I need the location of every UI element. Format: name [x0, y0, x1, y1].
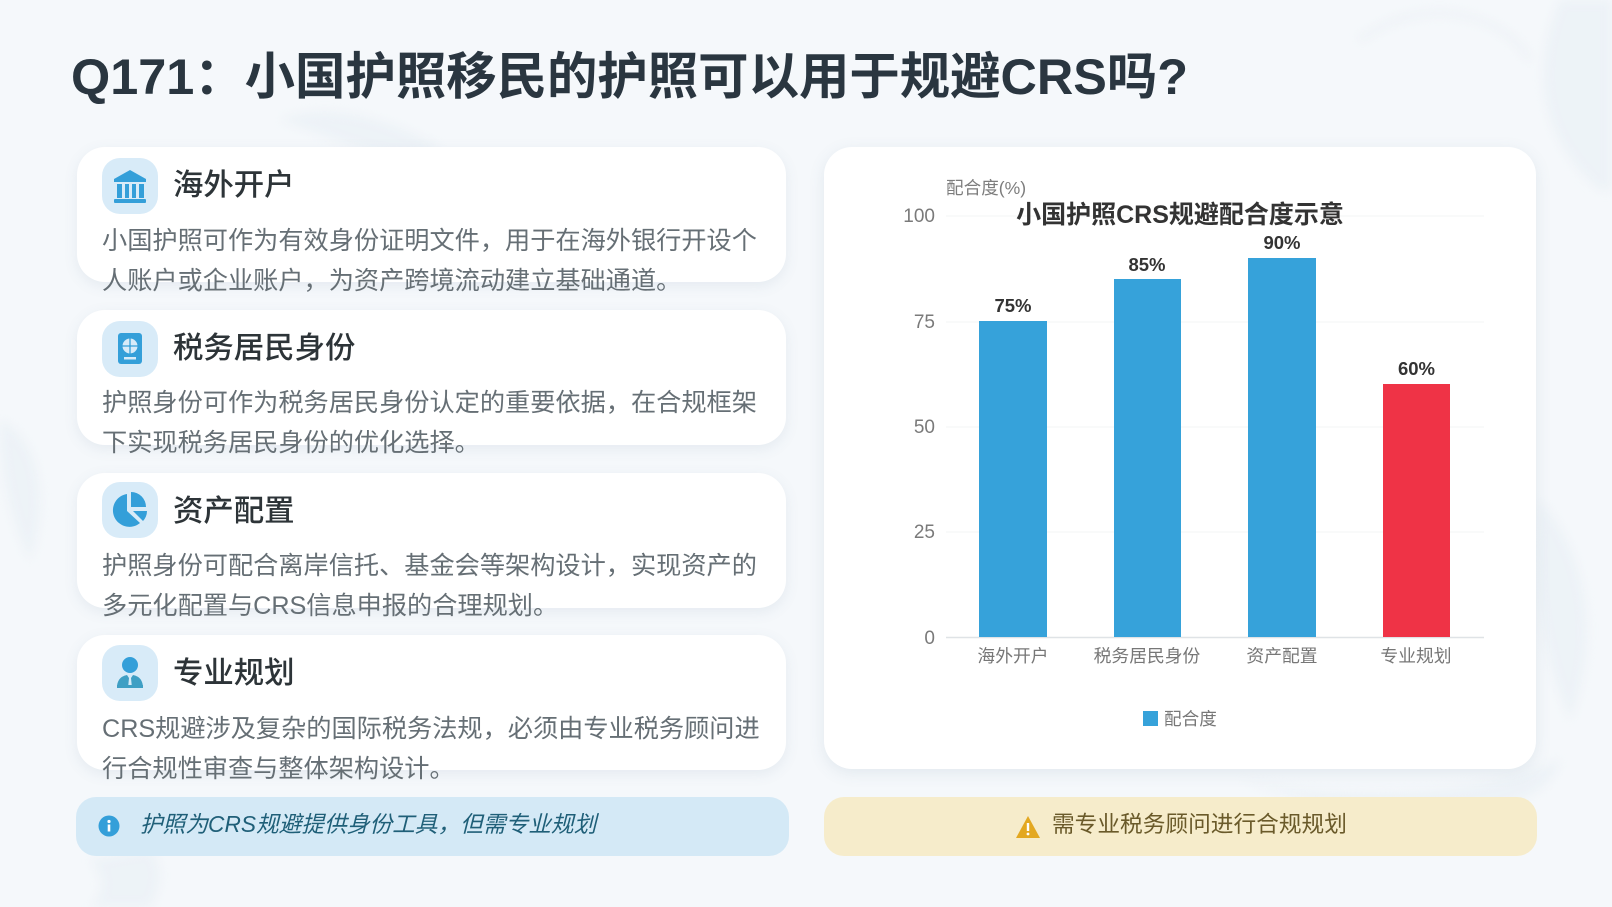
- callout text: 护照为CRS规避提供身份工具，但需专业规划: [140, 811, 596, 837]
- value labels: 90%: [1263, 232, 1301, 253]
- chart title: 小国护照CRS规避配合度示意: [1016, 200, 1344, 229]
- icon: pie chart: [102, 482, 158, 538]
- y axis labels: 75: [914, 312, 935, 333]
- panel: 海外开户: [77, 147, 786, 282]
- panel: 税务居民身份: [77, 310, 786, 445]
- y axis labels: [903, 206, 935, 649]
- panel: 资产配置: [77, 473, 786, 608]
- card body text: [102, 389, 757, 457]
- card body text: 多元化配置与CRS信息申报的合理规划。: [102, 592, 558, 620]
- y axis labels: 25: [914, 522, 935, 543]
- callout: info: [76, 797, 789, 856]
- x axis labels: 税务居民身份: [1094, 646, 1201, 666]
- y axis title: 配合度(%): [946, 178, 1026, 198]
- card body text: 行合规性审查与整体架构设计。: [102, 755, 455, 783]
- legend: 配合度: [1164, 709, 1217, 729]
- title: Q171：小国护照移民的护照可以用于规避CRS吗?: [71, 48, 1188, 105]
- card heading: 税务居民身份: [173, 331, 355, 365]
- y axis labels: 100: [903, 206, 935, 227]
- card body text: CRS规避涉及复杂的国际税务法规，必须由专业税务顾问进: [102, 715, 760, 743]
- card body text: 小国护照可作为有效身份证明文件，用于在海外银行开设个: [102, 227, 757, 255]
- panel: 专业规划: [77, 635, 786, 770]
- card body text: 下实现税务居民身份的优化选择。: [102, 429, 480, 457]
- callout: warning: [824, 797, 1537, 856]
- card body text: 人账户或企业账户，为资产跨境流动建立基础通道。: [102, 267, 681, 295]
- y axis labels: 50: [914, 417, 935, 438]
- card heading: 资产配置: [173, 494, 295, 528]
- card heading: 海外开户: [173, 168, 295, 202]
- card heading: 专业规划: [173, 656, 295, 690]
- icon: warning: [1016, 816, 1040, 838]
- card body text: 护照身份可作为税务居民身份认定的重要依据，在合规框架: [102, 389, 757, 417]
- panel: bar chart: [824, 147, 1536, 769]
- icon: bank: [102, 158, 158, 214]
- value labels: 85%: [1128, 254, 1166, 275]
- x axis labels: 海外开户: [977, 646, 1049, 666]
- bars: [979, 258, 1450, 637]
- value labels: [994, 232, 1435, 379]
- value labels: 75%: [994, 295, 1032, 316]
- card body text: [102, 227, 757, 295]
- icon: passport: [102, 321, 158, 377]
- card body text: [102, 715, 760, 783]
- icon: info: [98, 816, 120, 836]
- value labels: 60%: [1398, 358, 1435, 379]
- icon: advisor: [102, 645, 158, 701]
- callout text: 需专业税务顾问进行合规规划: [1052, 811, 1347, 837]
- x axis labels: [977, 646, 1452, 666]
- card body text: [102, 552, 757, 620]
- card body text: 护照身份可配合离岸信托、基金会等架构设计，实现资产的: [102, 552, 757, 580]
- y axis labels: 0: [924, 628, 935, 649]
- x axis labels: 专业规划: [1380, 646, 1452, 666]
- x axis labels: 资产配置: [1246, 646, 1318, 666]
